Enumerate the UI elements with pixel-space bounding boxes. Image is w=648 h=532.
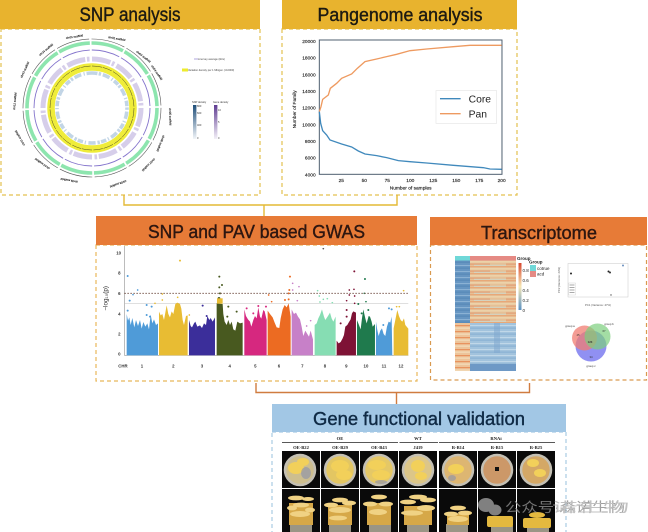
chart labels: chromosome names: chr07 scaffold	[141, 157, 156, 173]
chart labels: chromosome names	[12, 33, 173, 189]
connector: bottom bracket	[256, 383, 530, 404]
column headers: OE	[337, 436, 343, 441]
legend: SNP density and gene density: SNP density	[192, 100, 207, 104]
column headers: RNAi	[490, 436, 502, 441]
axis labels: 2	[118, 332, 121, 337]
axis labels: 12000	[302, 106, 316, 112]
chart labels: chromosome names: chr14 scaffold	[38, 42, 54, 57]
panel: Transcriptome	[430, 217, 647, 380]
chart labels: chromosome names: chr11 scaffold	[14, 129, 26, 146]
panel: Gene functional validation	[272, 404, 566, 532]
axis labels: 0	[118, 352, 121, 357]
axis labels: 75	[385, 178, 390, 184]
chart labels: chromosome names: chr13 scaffold	[19, 61, 30, 78]
chart: Venn diagram: 123	[588, 340, 593, 344]
chromosome columns	[127, 303, 408, 355]
axis labels: 8000	[305, 139, 316, 145]
chart labels: chromosome names: chr02 scaffold	[108, 35, 126, 42]
heading: SNP analysis: SNP analysis	[80, 5, 180, 26]
legend: heatmap colour scale and group: acd	[537, 272, 545, 276]
axis labels: 4000	[305, 172, 316, 178]
axis labels: 2	[172, 364, 175, 369]
chart: Venn diagram	[565, 322, 614, 368]
heading: Pangenome analysis	[282, 0, 517, 29]
scatter points	[127, 248, 404, 327]
axis labels: 125	[429, 178, 438, 184]
axis labels: 6000	[305, 156, 316, 162]
photo grid: fruiting bodies	[282, 489, 555, 532]
legend: heatmap colour scale and group: cotrue	[537, 266, 550, 271]
chart: Venn diagram: 45	[576, 333, 580, 337]
chart labels: chromosome names: chr09 scaffold	[60, 177, 78, 184]
legend	[436, 91, 497, 123]
column headers	[282, 436, 555, 450]
legend: SNP density and gene density: Gene density	[213, 100, 229, 104]
column headers: OE-B43	[371, 445, 388, 450]
watermark	[478, 498, 629, 516]
axis labels	[103, 250, 404, 369]
chart: Venn diagram: 67	[602, 329, 606, 333]
chart: Venn diagram: group b	[604, 322, 614, 326]
watermark: 诺生物	[552, 500, 629, 515]
panel: Pangenome analysis	[282, 0, 517, 195]
chart labels: chromosome names: chr04 scaffold	[150, 64, 164, 81]
caps	[287, 495, 472, 522]
legend: SNP density and gene density: 5	[218, 120, 220, 124]
axis labels: 150	[452, 178, 461, 184]
legend: heatmap colour scale and group: 0.8	[522, 268, 529, 273]
stems	[289, 503, 469, 525]
axis labels: −log₁₀(p)	[103, 286, 110, 311]
jars	[290, 524, 549, 532]
axis labels: 100	[406, 178, 415, 184]
chart labels: chromosome names: chr03 scaffold	[135, 50, 152, 64]
axis labels: 14000	[302, 89, 316, 95]
axis labels: 6	[118, 291, 121, 296]
chart: circular SNP density plot	[23, 39, 161, 177]
axis labels: 10000	[302, 122, 316, 128]
legend: line and band	[182, 57, 234, 72]
axis labels: 8	[118, 271, 121, 276]
axis labels	[292, 39, 506, 191]
legend: heatmap colour scale and group	[517, 256, 550, 313]
panel: SNP analysis	[0, 0, 260, 195]
axis labels: 1	[141, 364, 144, 369]
photo grid: culture dishes	[282, 451, 555, 488]
legend: Core	[469, 94, 491, 105]
axis labels: 11	[382, 364, 387, 369]
chart: PCA scatter plot	[557, 264, 628, 307]
chart labels: chromosome names: chr12 scaffold	[12, 92, 18, 110]
axis labels: 25	[339, 178, 344, 184]
legend: SNP density and gene density: 10	[218, 108, 221, 112]
axis labels: 10	[364, 364, 369, 369]
heading: Pangenome analysis: Pangenome analysis	[318, 5, 482, 25]
axis labels: 200	[498, 178, 506, 184]
heading: Transcriptome: Transcriptome	[481, 223, 597, 243]
axis labels: 6	[278, 364, 281, 369]
legend: SNP density and gene density: 600	[197, 111, 202, 115]
column headers: R-B25	[530, 445, 543, 450]
panel: SNP and PAV based GWAS	[96, 216, 417, 381]
chart labels: chromosome names: chr01 scaffold	[66, 33, 84, 40]
axis labels: 7	[301, 364, 304, 369]
legend: heatmap colour scale and group: 0.6	[522, 278, 529, 283]
column headers: OE-B22	[293, 445, 310, 450]
column headers: WT	[414, 436, 422, 441]
chart labels: chromosome names: chr05 scaffold	[168, 108, 173, 126]
threshold line	[124, 292, 408, 295]
legend: SNP density and gene density: 0	[197, 136, 199, 140]
chart: Venn diagram: group a	[565, 324, 575, 328]
heading: Gene functional validation: Gene functional validation	[313, 409, 525, 429]
heading: SNP and PAV based GWAS	[96, 216, 417, 245]
legend: Pan	[469, 109, 487, 120]
axis labels: 4	[118, 311, 121, 316]
chart labels: chromosome names: chr06 scaffold	[155, 135, 166, 153]
legend: SNP density and gene density	[192, 100, 229, 140]
heading: SNP analysis	[0, 0, 260, 29]
axis labels: CHR	[118, 364, 129, 369]
column headers: R-B14	[452, 445, 465, 450]
line chart: core and pan gene families	[292, 39, 506, 191]
chart: heatmap	[455, 256, 516, 371]
axis labels: Number of samples	[390, 185, 432, 191]
axis labels: Number of Family	[292, 90, 298, 128]
watermark: 公众号·森诺生物	[505, 500, 625, 515]
icon: chat bubbles	[478, 498, 502, 516]
line: pan	[319, 45, 502, 112]
heading: SNP and PAV based GWAS: SNP and PAV based GWAS	[148, 222, 365, 242]
legend: line and band: Line key average (kb/s)	[198, 57, 225, 61]
chart: Venn diagram: 34	[589, 355, 593, 359]
chart: Manhattan plot	[103, 246, 408, 369]
legend: heatmap colour scale and group: 0.2	[522, 298, 529, 303]
chart: PCA scatter plot: PC1 (Variance: 47%)	[585, 303, 611, 307]
axis labels: 12	[399, 364, 404, 369]
axis labels: 3	[201, 364, 204, 369]
legend: line and band: Variation density per 1 Mb/gen (×10000)	[188, 68, 234, 72]
chart: PCA scatter plot: PC2 (Variance: 23%)	[557, 267, 561, 293]
line: core	[319, 112, 502, 169]
axis labels: 4	[228, 364, 231, 369]
chart labels: chromosome names: chr08 scaffold	[109, 179, 127, 189]
column headers: R-B15	[491, 445, 504, 450]
axis labels: 5	[254, 364, 257, 369]
legend: SNP density and gene density: 0	[218, 136, 220, 140]
chart: Venn diagram: group c	[586, 364, 596, 368]
axis labels: 16000	[302, 72, 316, 78]
connector: top bracket	[124, 195, 397, 216]
axis labels: 10	[116, 250, 122, 255]
short growth	[487, 512, 551, 528]
legend: heatmap colour scale and group: Group	[517, 256, 531, 261]
legend: heatmap colour scale and group: Group	[529, 260, 543, 264]
chart labels: chromosome names: chr10 scaffold	[34, 157, 51, 170]
column headers: J419	[413, 445, 423, 450]
legend: heatmap colour scale and group: 0	[522, 308, 526, 313]
axis labels: 20000	[302, 39, 316, 45]
legend: heatmap colour scale and group: 0.4	[522, 288, 529, 293]
heading: Transcriptome	[430, 217, 647, 245]
legend: SNP density and gene density: 400	[197, 123, 202, 127]
legend: SNP density and gene density: 800	[197, 104, 202, 108]
axis labels: 8	[324, 364, 327, 369]
axis labels: 50	[362, 178, 367, 184]
axis labels: 175	[475, 178, 484, 184]
axis labels: 18000	[302, 56, 316, 62]
axis labels: 9	[345, 364, 348, 369]
heading: Gene functional validation	[272, 404, 566, 432]
column headers: OE-B29	[332, 445, 349, 450]
